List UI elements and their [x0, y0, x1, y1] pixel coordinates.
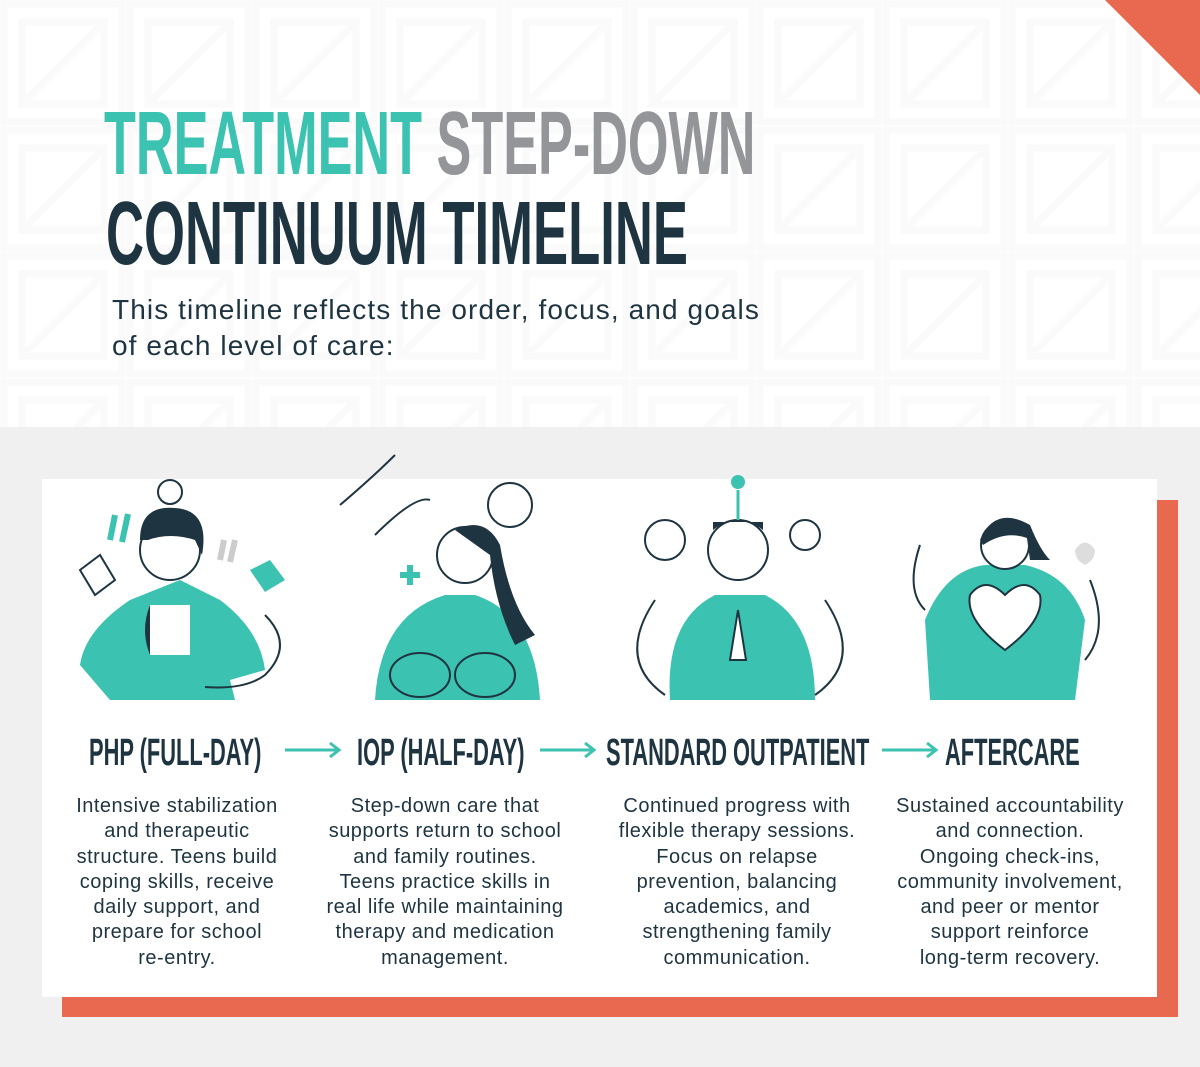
- illustration: PHP person: [78, 479, 285, 700]
- text: Aftercare: and peer or mentor: [920, 896, 1100, 918]
- text: Standard: prevention, balancing: [637, 871, 837, 893]
- text: Aftercare: [896, 795, 1124, 969]
- text: Standard: flexible therapy sessions.: [619, 820, 855, 842]
- text: Aftercare: and connection.: [936, 820, 1084, 842]
- orange shadow card: [62, 500, 1178, 1017]
- illustration: IOP person: [339, 454, 540, 700]
- text: Aftercare: Ongoing check-ins,: [920, 846, 1100, 868]
- text: IOP: Step-down care that: [351, 795, 539, 817]
- text: IOP: management.: [381, 947, 509, 969]
- text: IOP: supports return to school: [329, 820, 561, 842]
- arrow 1: [285, 742, 342, 758]
- text: PHP: and therapeutic: [104, 820, 250, 842]
- heading: Standard outpatient: STANDARD OUTPATIENT: [606, 732, 869, 774]
- background pattern: [0, 0, 1200, 427]
- heading: IOP: IOP (HALF-DAY): [357, 732, 525, 774]
- illustration: Standard outpatient person: [636, 475, 844, 700]
- title: [104, 94, 755, 284]
- text: Standard: [619, 795, 855, 969]
- heading: Aftercare: AFTERCARE: [945, 732, 1080, 774]
- text: IOP: and family routines.: [353, 846, 537, 868]
- gray band: [0, 427, 1200, 1067]
- illustration: Aftercare person: [912, 518, 1100, 700]
- arrow 2: [540, 742, 596, 758]
- white card: [42, 479, 1157, 997]
- title: CONTINUUM TIMELINE: [106, 184, 688, 284]
- subtitle: This timeline reflects the order, focus, and goals: [112, 294, 760, 325]
- text: PHP: prepare for school: [92, 921, 262, 943]
- text: IOP: therapy and medication: [336, 921, 554, 943]
- text: PHP: coping skills, receive: [80, 871, 274, 893]
- text: Standard: communication.: [663, 947, 811, 969]
- text: Aftercare: support reinforce: [931, 921, 1089, 943]
- text: Aftercare: long-term recovery.: [920, 947, 1100, 969]
- text: IOP: Teens practice skills in: [340, 871, 550, 893]
- title: TREATMENT STEP-DOWN: [104, 94, 755, 194]
- text: Standard: academics, and: [663, 896, 811, 918]
- text: PHP: structure. Teens build: [77, 846, 277, 868]
- text: Standard: Focus on relapse: [656, 846, 818, 868]
- text: Aftercare: Sustained accountability: [896, 795, 1124, 817]
- text: PHP: re-entry.: [138, 947, 216, 969]
- subtitle: of each level of care:: [112, 330, 395, 361]
- subtitle: [112, 294, 760, 361]
- text: PHP: Intensive stabilization: [76, 795, 278, 817]
- text: PHP: daily support, and: [94, 896, 260, 918]
- text: Aftercare: community involvement,: [897, 871, 1123, 893]
- text: IOP: real life while maintaining: [327, 896, 563, 918]
- text: Standard: Continued progress with: [623, 795, 851, 817]
- arrow 3: [882, 742, 938, 758]
- text: IOP: [327, 795, 563, 969]
- text: Standard: strengthening family: [642, 921, 831, 943]
- text: PHP: [76, 795, 278, 969]
- corner triangle: [1105, 0, 1200, 95]
- heading: PHP: PHP (FULL-DAY): [89, 732, 261, 774]
